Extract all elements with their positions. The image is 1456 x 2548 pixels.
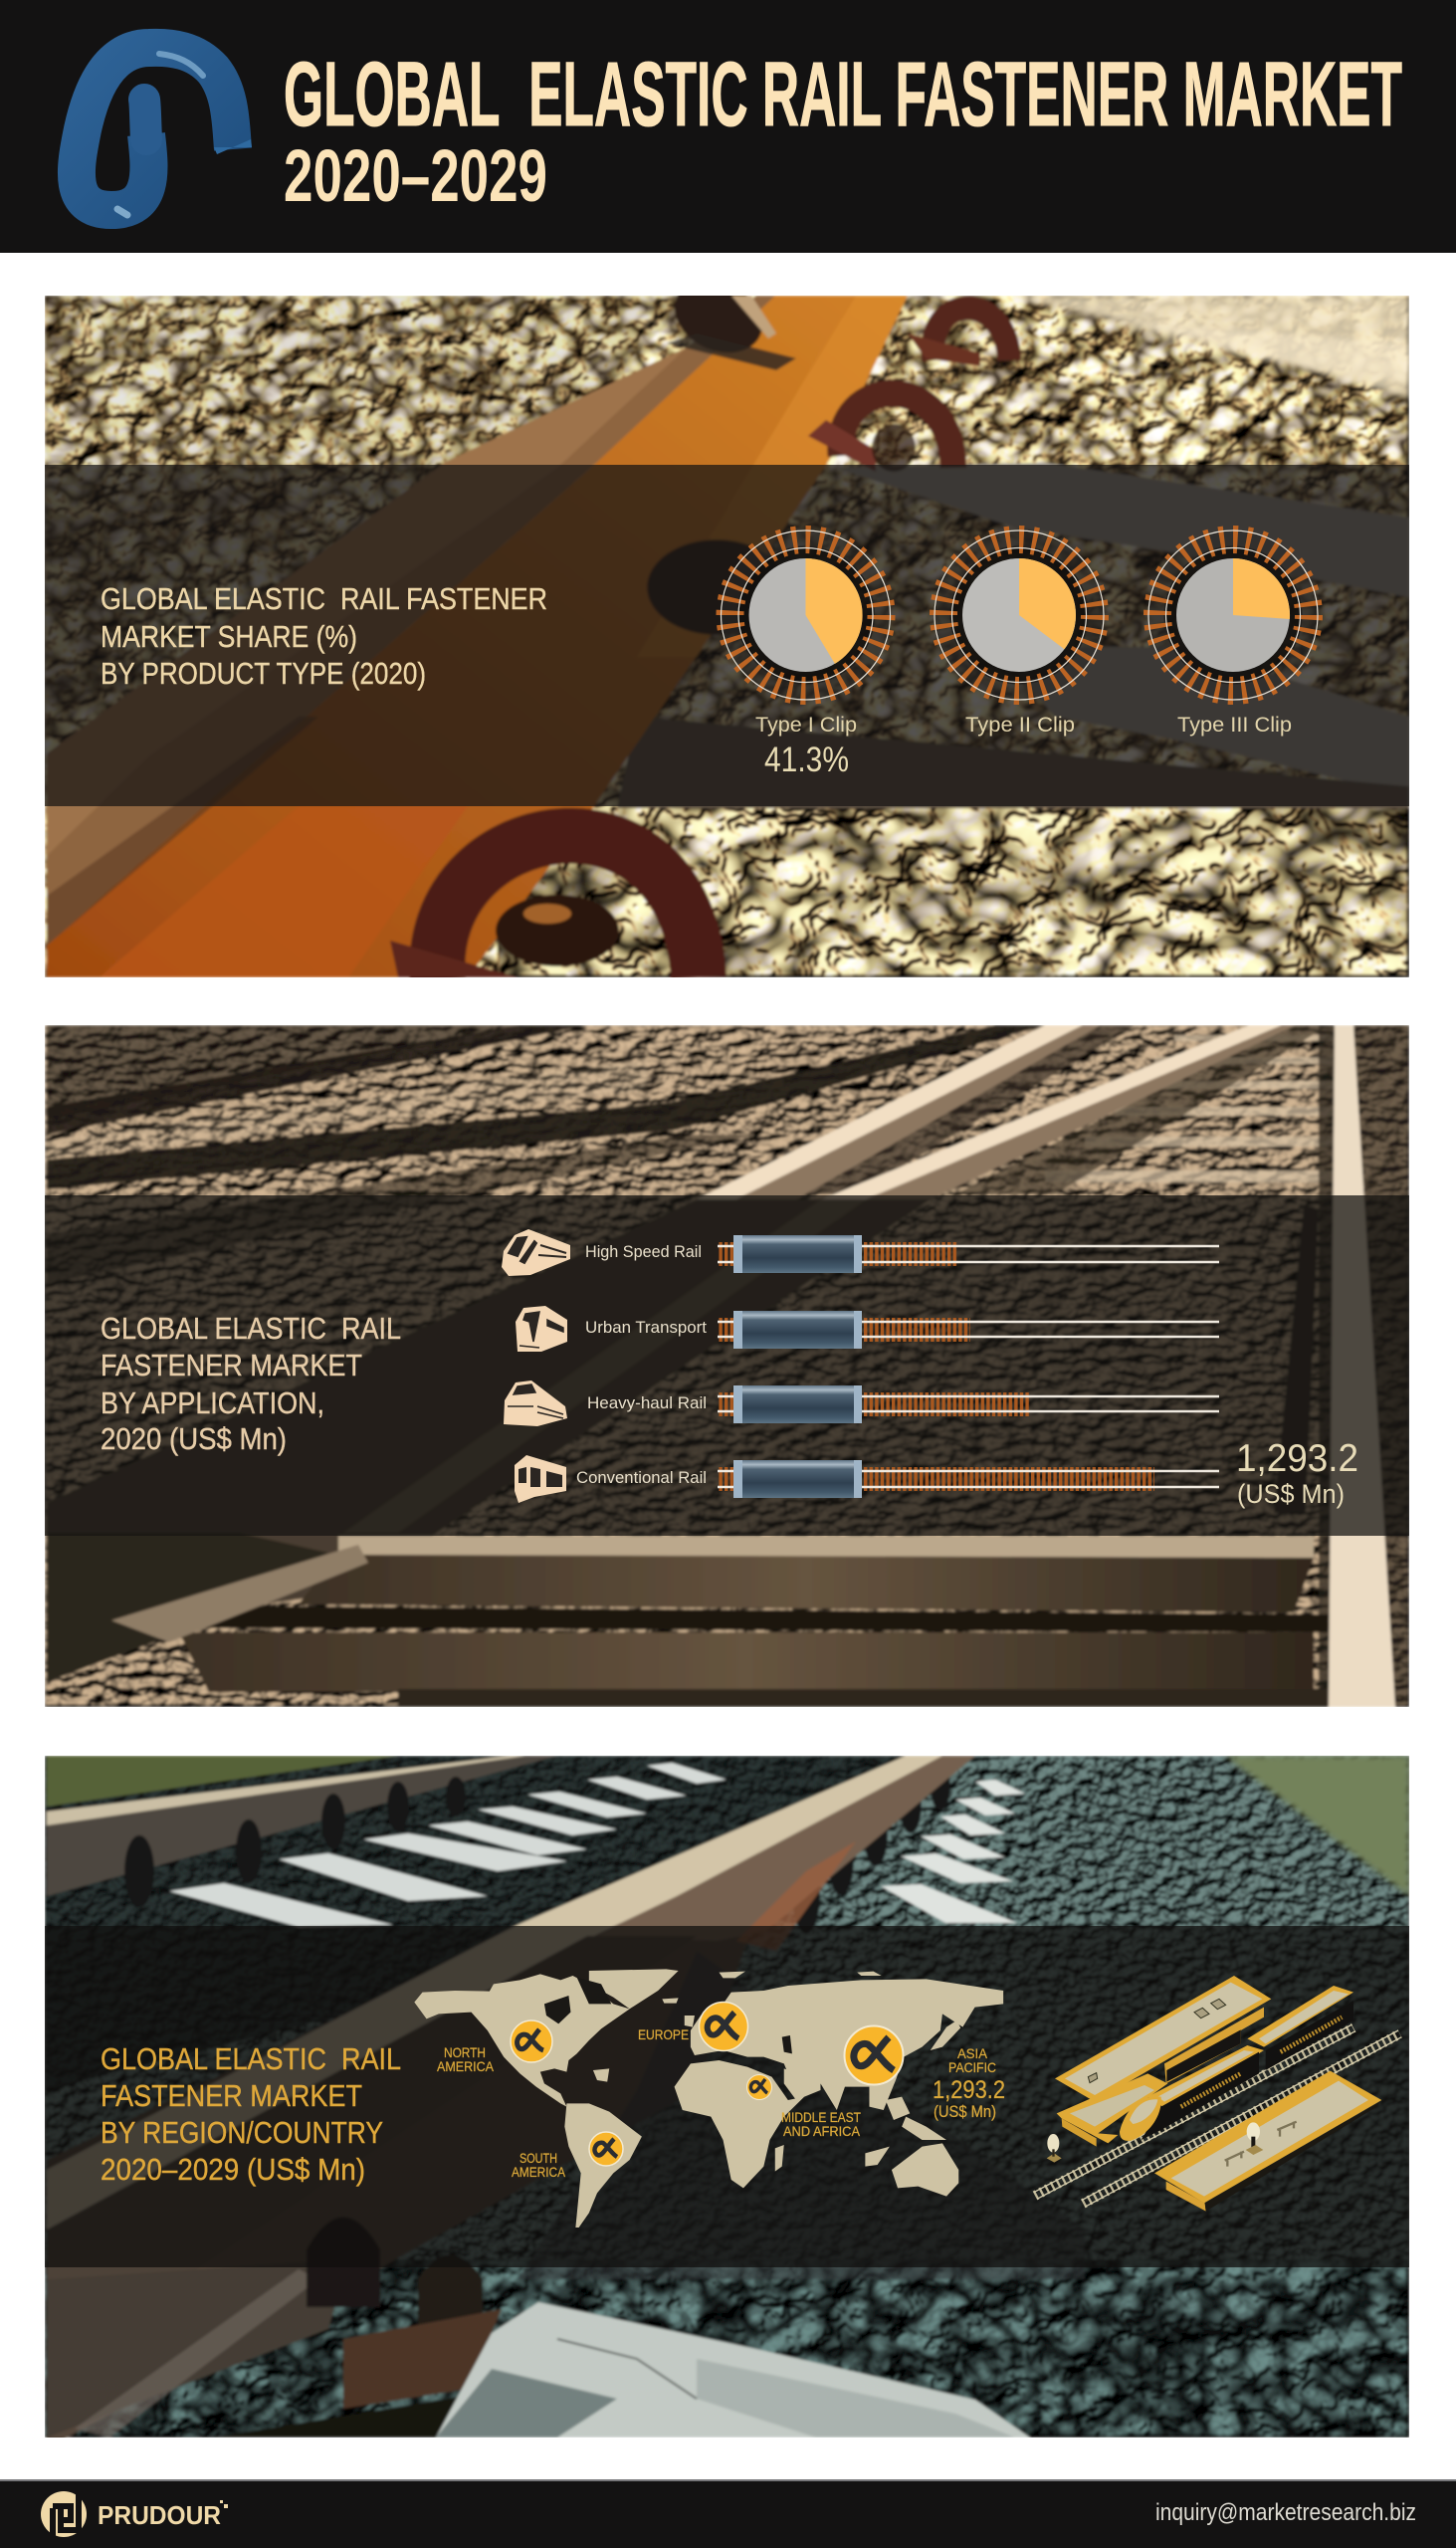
- bright rail A: [697, 1025, 1083, 1199]
- left rail: [47, 1756, 557, 1896]
- chart: Type II Clip donut: Type II Clip: [965, 714, 1075, 737]
- right of vertical rail: [1353, 1025, 1409, 1707]
- concrete sleeper: [436, 2302, 1030, 2438]
- rail continuation under band: [47, 1199, 931, 1632]
- marker: South America: [589, 2132, 623, 2166]
- world map: [414, 1969, 1005, 2228]
- marker: North America: [511, 2020, 552, 2062]
- clip in band: [647, 539, 766, 636]
- bar row: Heavy-haul Rail: [504, 1380, 1219, 1426]
- photo: sepia converging tracks: [45, 1025, 1409, 1707]
- bottom sleepers: [299, 1553, 1314, 1612]
- heading: region: GLOBAL ELASTIC RAIL: [101, 2041, 401, 2076]
- sleepers left: [169, 1763, 727, 1927]
- callout: 1,293.2 value: 1,293.2: [1236, 1437, 1358, 1480]
- clip bottom: [437, 836, 699, 980]
- marker: Europe: [699, 2003, 748, 2050]
- chart: Type I Clip donut: [721, 531, 890, 779]
- heading: market share: GLOBAL ELASTIC RAIL FASTENER: [101, 581, 547, 616]
- region labels: PACIFIC: [948, 2059, 996, 2075]
- ties between bright rails: [766, 1025, 1135, 1194]
- callout: 1,293.2 value: [1236, 1437, 1358, 1509]
- heading: application: 2020 (US$ Mn): [101, 1421, 287, 1456]
- heading: region: FASTENER MARKET: [101, 2078, 362, 2113]
- region labels: AND AFRICA: [783, 2123, 861, 2139]
- region labels: [437, 2026, 1005, 2180]
- panel: market by region: [45, 1756, 1409, 2448]
- bar row: High Speed Rail: High Speed Rail: [585, 1242, 702, 1261]
- bolts and plate: [214, 2218, 537, 2438]
- region labels: AMERICA: [437, 2058, 495, 2074]
- icon: heavy-haul locomotive: [504, 1380, 567, 1426]
- photo: teal gravel track: [45, 1756, 1409, 2448]
- bar row: Heavy-haul Rail: Heavy-haul Rail: [587, 1393, 707, 1412]
- icon: Prudour logo: [41, 2491, 87, 2537]
- main rail head: [47, 1756, 942, 2289]
- chart: Type I Clip donut: 41.3%: [764, 741, 849, 779]
- callout: 1,293.2 value: (US$ Mn): [1237, 1479, 1345, 1509]
- train front car: [1147, 2045, 1264, 2110]
- region labels: MIDDLE EAST: [781, 2109, 861, 2125]
- station glazing and canopy: [1164, 2008, 1264, 2083]
- chart: Type I Clip donut: Type I Clip: [755, 714, 857, 737]
- near platform: [1154, 2071, 1381, 2203]
- dark overlay band: [45, 465, 1409, 806]
- contact email: inquiry@marketresearch.biz: [1155, 2499, 1416, 2526]
- bright rail B: [821, 1025, 1282, 1199]
- heading: market share: MARKET SHARE (%): [101, 619, 357, 654]
- footer band: [0, 2479, 1456, 2548]
- chart: Type III Clip donut: Type III Clip: [1177, 714, 1292, 737]
- band-area dark ballast: [518, 1951, 1085, 2279]
- right vertical rail: [1329, 1025, 1395, 1707]
- bar row: High Speed Rail: [502, 1229, 1219, 1276]
- benches and lamp: [1225, 2122, 1297, 2167]
- panel: market by application: [45, 1025, 1409, 1707]
- rail foot: [47, 2259, 348, 2438]
- heading: application: GLOBAL ELASTIC RAIL: [101, 1311, 401, 1346]
- marker: Middle East and Africa: [746, 2074, 772, 2100]
- icon: high speed train: [502, 1229, 570, 1276]
- heading: application: FASTENER MARKET: [101, 1348, 362, 1382]
- heading: region: 2020–2029 (US$ Mn): [101, 2152, 365, 2187]
- region labels: ASIA: [957, 2045, 988, 2061]
- chart: Type II Clip donut: [935, 531, 1104, 737]
- sleepers upper right: [1045, 1035, 1334, 1182]
- train rear car: [1247, 1986, 1353, 2047]
- panel: market share by product type: [45, 267, 1409, 980]
- icon: brand dots: [220, 2500, 228, 2508]
- photo: rusty rail and rocks: [45, 267, 1409, 980]
- chart: Type III Clip donut: [1148, 531, 1318, 737]
- bar row: Urban Transport: Urban Transport: [585, 1318, 707, 1337]
- bar row: Conventional Rail: Conventional Rail: [576, 1468, 707, 1487]
- rail head: [47, 296, 908, 977]
- icon: elastic rail clip: [77, 48, 252, 215]
- brand name: PRUDOUR: [98, 2500, 221, 2530]
- heading: region: BY REGION/COUNTRY: [101, 2115, 383, 2150]
- region labels: 1,293.2: [933, 2076, 1005, 2104]
- rail web: [47, 296, 796, 946]
- region labels: EUROPE: [638, 2026, 689, 2042]
- left platform: [1057, 2073, 1167, 2143]
- icon: urban train: [516, 1306, 567, 1352]
- icon: conventional train: [515, 1455, 566, 1503]
- heading: application: [101, 1311, 401, 1456]
- upper left rails: [47, 1025, 520, 1120]
- heading: market share: [101, 581, 547, 691]
- lump on rail top: [674, 296, 763, 353]
- grass: [47, 1756, 398, 1806]
- fastener bolts: [124, 1763, 950, 1934]
- sleepers right: [881, 1780, 1025, 1923]
- region labels: SOUTH: [520, 2150, 557, 2166]
- bar row: Conventional Rail: [515, 1455, 1219, 1503]
- dark overlay band: [45, 1195, 1409, 1536]
- region labels: AMERICA: [512, 2164, 566, 2180]
- marker: Asia Pacific: [844, 2026, 904, 2084]
- tracks: [1034, 2024, 1401, 2207]
- main rail web: [47, 1756, 975, 2448]
- subtitle: years: 2020–2029: [284, 134, 547, 217]
- illustration: isometric train station: [1034, 1976, 1401, 2212]
- bar row: Urban Transport: [516, 1306, 1219, 1352]
- heading: region: [101, 2041, 401, 2187]
- header band: [0, 0, 1456, 253]
- clip top: [933, 309, 1009, 360]
- dark overlay band: [45, 1926, 1409, 2267]
- clip mid: [841, 393, 953, 468]
- heading: market share: BY PRODUCT TYPE (2020): [101, 656, 426, 691]
- region labels: (US$ Mn): [934, 2102, 996, 2121]
- region labels: NORTH: [444, 2044, 486, 2060]
- heading: application: BY APPLICATION,: [101, 1385, 324, 1420]
